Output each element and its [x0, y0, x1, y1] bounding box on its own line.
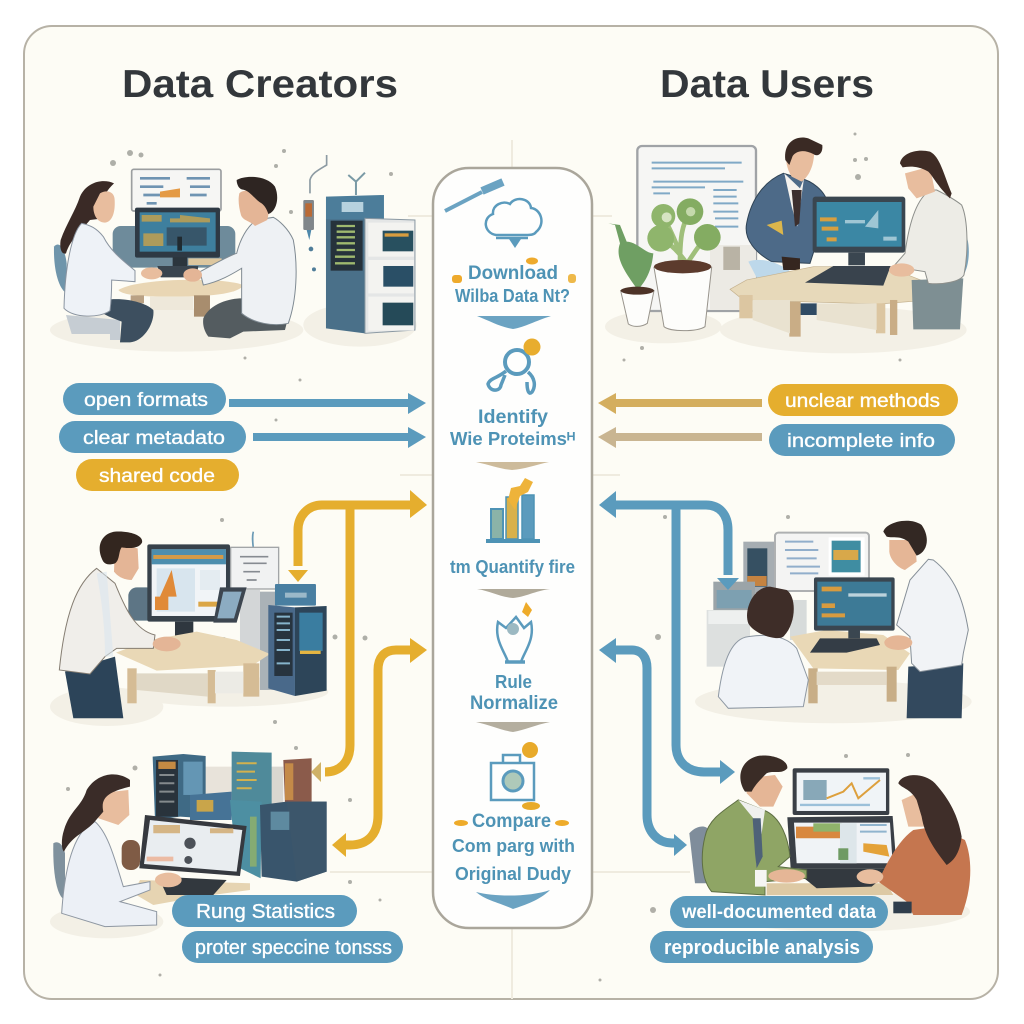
pill: well-documented data: well-documented data — [681, 902, 876, 923]
step 5 text: Compare: Com parg with — [452, 836, 575, 856]
step 4 text: Rule Normalize: Rule — [495, 672, 532, 692]
arrow: unclear methods into workflow — [598, 393, 762, 414]
step 4 text: Rule Normalize: Normalize — [470, 693, 558, 714]
heading: Data Users: Data Users — [660, 63, 874, 106]
chevron 4 — [476, 722, 550, 732]
pill: incomplete info: incomplete info — [787, 431, 935, 452]
heading: Data Creators: Data Creators — [122, 63, 398, 106]
pill: shared code — [76, 459, 239, 491]
chevron 2 — [476, 462, 549, 470]
pill: open formats — [63, 383, 226, 415]
pill: shared code: shared code — [99, 466, 215, 487]
chevron 1 — [477, 316, 551, 329]
pill: proter speccine tonsss — [182, 931, 403, 963]
icon: wrench — [445, 182, 503, 211]
step 4 text: Rule Normalize — [470, 672, 558, 714]
panel: central workflow capsule — [433, 168, 592, 928]
blue arrows: right exchange — [599, 491, 739, 856]
step 2 text: Identify — [450, 407, 575, 449]
icon: bar chart — [486, 478, 540, 543]
icon: download cloud — [486, 199, 541, 248]
pill: incomplete info — [769, 424, 955, 456]
pill: reproducible analysis: reproducible analysis — [664, 937, 860, 959]
pill: proter speccine tonsss: proter speccine tonsss — [195, 937, 392, 959]
scattered specks — [66, 132, 910, 982]
step 2 text: Identify: Identify — [478, 407, 548, 428]
step 5 text: Compare: Compare — [472, 811, 551, 832]
step 5 text: Compare: Original Dudy — [455, 864, 571, 884]
pill: clear metadato: clear metadato — [83, 428, 225, 449]
pill: reproducible analysis — [650, 931, 873, 963]
pill: Rung Statistics: Rung Statistics — [196, 901, 335, 923]
scene: data users top, colleagues with plants and a computer — [605, 138, 969, 353]
arrow: open formats into workflow — [229, 393, 426, 414]
icon: cupped hands — [497, 602, 532, 662]
arrow: incomplete info into workflow — [598, 427, 762, 448]
step 3 text: Quantify: tm Quantify fire — [450, 557, 575, 577]
scene: data creators top, two colleagues at a computer — [50, 155, 417, 352]
scene: data creators bottom, researcher with laptop and server stacks — [50, 752, 327, 938]
scene: data users bottom, two colleagues with dual monitors — [689, 755, 970, 932]
pill: clear metadato — [59, 421, 246, 453]
scene: data users middle, two colleagues reviewing displays — [695, 521, 972, 723]
scene: data creators middle, analyst at a desk with server — [50, 532, 328, 726]
chevron 5 — [476, 890, 550, 909]
step 1 text: Download: Download — [468, 263, 558, 284]
step 2 text: Identify: Wie Proteimsᴴ — [450, 429, 575, 449]
pill: open formats: open formats — [84, 390, 208, 411]
step 5 text: Compare — [452, 811, 575, 884]
pill: unclear methods — [768, 384, 958, 416]
chevron 3 — [477, 589, 550, 598]
arrow: clear metadata into workflow — [253, 427, 426, 448]
yellow arrows: left exchange — [288, 490, 427, 857]
icon: camera — [491, 742, 540, 810]
pill: unclear methods: unclear methods — [785, 391, 940, 412]
step 1 text: Download — [452, 258, 576, 306]
pill: well-documented data — [670, 896, 888, 928]
step 1 text: Download: Wilba Data Nt? — [455, 286, 570, 306]
pill: Rung Statistics — [172, 895, 357, 927]
icon: magnifier — [488, 338, 540, 393]
